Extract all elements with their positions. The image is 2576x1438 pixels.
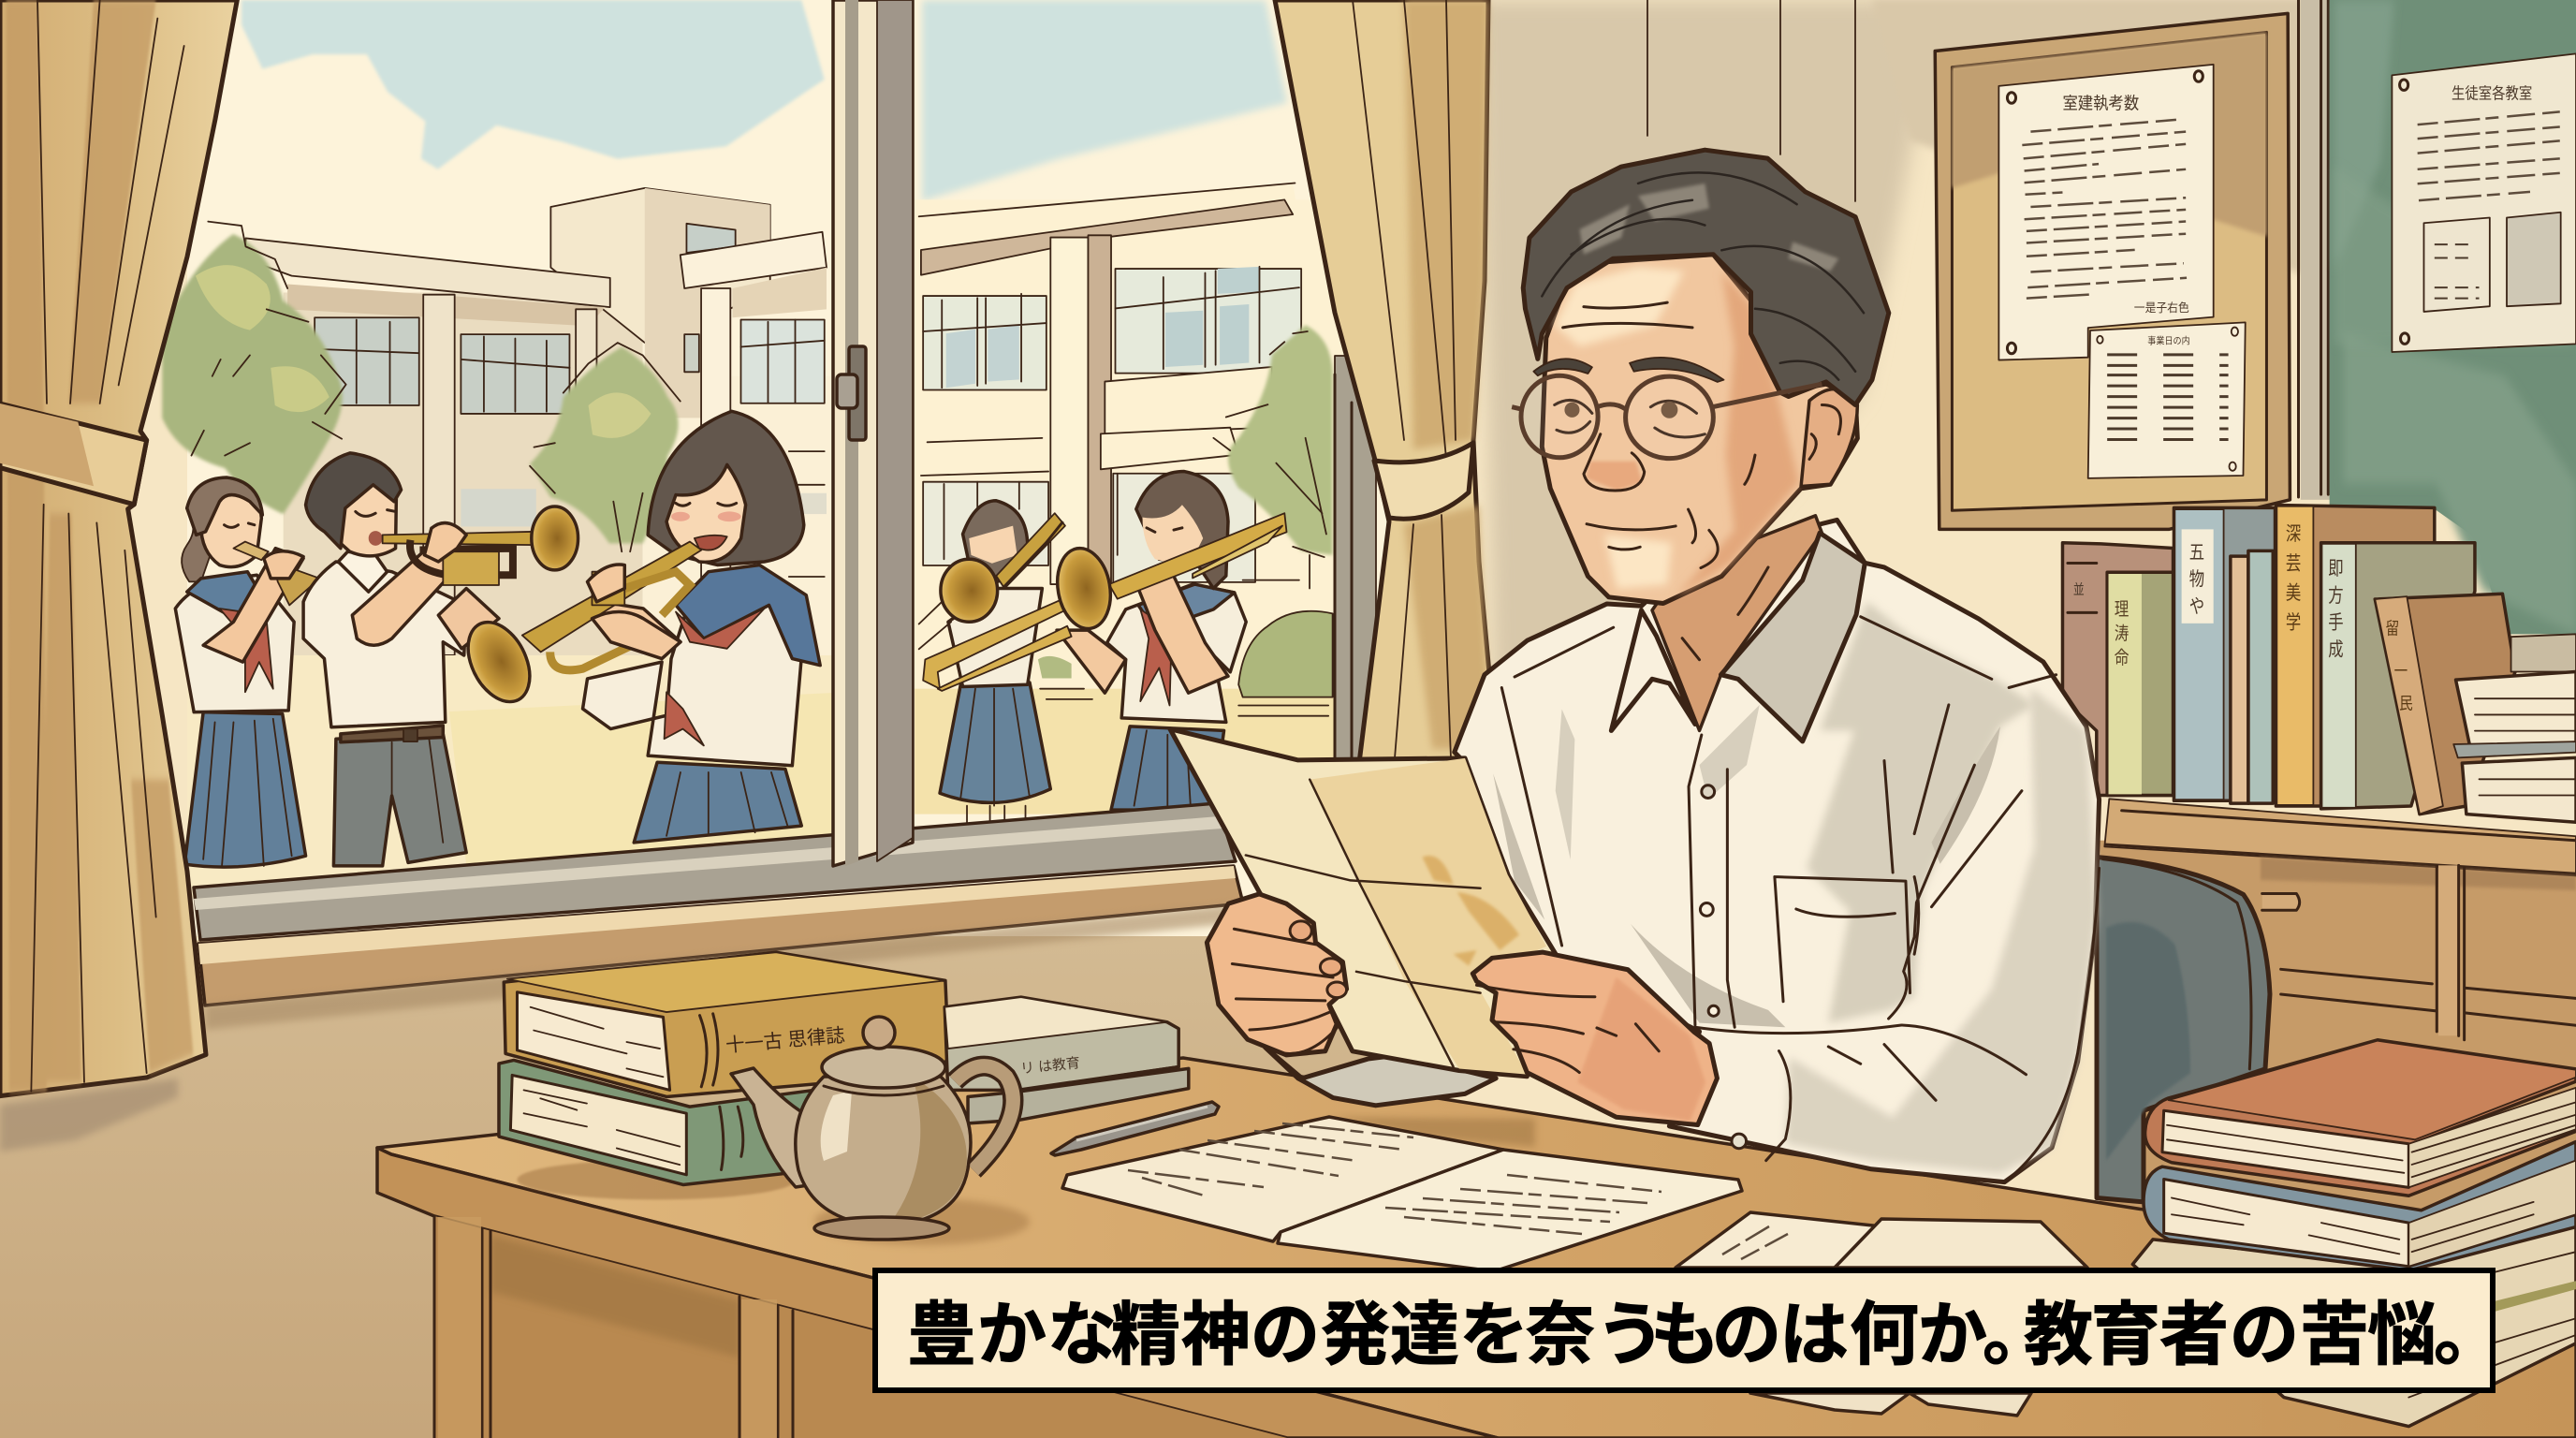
man: glasses xyxy=(1512,375,1822,459)
desk: front body and panel xyxy=(377,1148,1498,1438)
book: yellow-green volume: 涛 xyxy=(2115,623,2129,643)
notice: sheet on chalkboard xyxy=(2392,53,2576,352)
book: ochre volume: 十一古 思律誌 xyxy=(724,1025,845,1057)
icon: cabinet drawer pull xyxy=(2262,894,2300,910)
hand: left xyxy=(1207,894,1347,1055)
notice: main sheet: 室建執考数 xyxy=(2062,94,2140,113)
teapot: spout xyxy=(731,1068,814,1187)
window view: trees behind left pane xyxy=(162,222,681,551)
books on desk: yellow and green stack xyxy=(499,952,948,1199)
notice: small timetable sheet: 事業日の内 xyxy=(2147,334,2190,346)
book: yellow-green volume xyxy=(2107,572,2174,796)
pen xyxy=(1051,1102,1219,1155)
book: yellow-green volume: 理 xyxy=(2115,598,2129,620)
book: orange volume: 芸 xyxy=(2286,552,2301,574)
lower wall under window xyxy=(0,861,1404,1438)
book: pale green volume: 方 xyxy=(2328,584,2344,606)
left curtain xyxy=(0,0,237,1096)
books on desk: grey volumes behind teapot xyxy=(944,997,1189,1123)
book: orange volume: 学 xyxy=(2286,611,2301,633)
books on shelf xyxy=(2062,506,2576,822)
caption box xyxy=(875,1270,2503,1390)
papers under caption xyxy=(1676,1212,2087,1416)
book: ochre volume xyxy=(504,952,948,1096)
man: hands xyxy=(1207,894,1717,1125)
window view: ground at left pane xyxy=(187,655,833,899)
book: stack at shelf end xyxy=(2453,634,2576,822)
man: shirt shading xyxy=(1493,602,2097,1173)
book: pale green volume: 即 xyxy=(2328,557,2344,580)
man: ear xyxy=(1801,389,1857,487)
man: forehead wrinkles xyxy=(1563,302,1692,328)
letter xyxy=(1170,729,1558,1077)
man: left sleeve xyxy=(1266,1048,1496,1106)
man: head xyxy=(1512,150,1889,604)
book: brown volume: 並 xyxy=(2073,581,2085,597)
desk xyxy=(377,1058,2576,1438)
hand: right xyxy=(1472,952,1717,1125)
man: nose and mouth xyxy=(1584,434,1755,568)
open notebook xyxy=(1062,1117,1742,1271)
book: slim volumes xyxy=(2231,550,2273,803)
book: pale green volume: 手 xyxy=(2328,611,2344,633)
bulletin board xyxy=(1935,0,2331,529)
book: blue volume: 五 xyxy=(2189,541,2204,563)
centre curtain xyxy=(1275,0,1490,763)
green chalkboard and notice xyxy=(2330,0,2576,634)
window view: sky and clouds xyxy=(187,0,1404,936)
man: eyebrows xyxy=(1533,358,1723,382)
student: girl with ponytail xyxy=(175,477,319,867)
office chair xyxy=(2097,857,2270,1202)
icon: trumpet xyxy=(457,542,701,707)
man: chest pocket xyxy=(1775,877,1910,1002)
students: two trombone players at the right pane xyxy=(919,472,1287,823)
book: blue volume xyxy=(2174,507,2276,800)
teapot: handle xyxy=(955,1066,1013,1170)
man: face xyxy=(1542,255,1857,604)
notice: sheet on chalkboard: 生徒室各教室 xyxy=(2452,84,2532,103)
student: rear trombone girl xyxy=(919,501,1065,823)
man: shirt xyxy=(1455,516,2100,1182)
notice: small timetable sheet xyxy=(2088,322,2246,478)
window view: school building behind right pane xyxy=(915,183,1357,814)
book: leaning volume: 民 xyxy=(2399,694,2413,713)
book: orange volume xyxy=(2276,506,2435,806)
book: blue volume xyxy=(2144,1142,2576,1270)
student: boy with trumpet xyxy=(303,453,578,866)
teapot: body xyxy=(796,1077,971,1226)
man: hair xyxy=(1523,150,1889,404)
book: pale green volume xyxy=(2321,543,2475,809)
man: collar xyxy=(1720,533,1865,741)
book: yellow-green volume: 命 xyxy=(2115,647,2130,668)
caption text: 豊かな精神の発達を奈うものは何か。教育者の苦悩。 xyxy=(907,1296,2503,1373)
teapot xyxy=(731,1017,1030,1245)
students: three trumpet players at the left pane xyxy=(175,411,820,867)
shelf and cabinet xyxy=(2100,799,2576,1256)
book: leaning volume: 一 xyxy=(2394,662,2408,682)
right book stack xyxy=(2132,1040,2576,1427)
books on desk: grey volumes behind teapot: リ は教育 xyxy=(1019,1055,1081,1078)
left curtain floor shadow xyxy=(0,1078,178,1152)
book: olive volume xyxy=(2132,1219,2576,1427)
man: eyes xyxy=(1555,400,1705,437)
book: brown volume xyxy=(2062,543,2174,796)
man: neck xyxy=(1652,516,1822,730)
book: green volume xyxy=(499,1060,939,1184)
man: sleeve and cuff lines xyxy=(1695,1025,2027,1161)
icon: window latch xyxy=(837,346,866,440)
teapot: lid and knob xyxy=(822,1047,945,1088)
notice: main sheet xyxy=(1998,65,2214,360)
book: orange volume: 深 xyxy=(2286,522,2301,544)
book: blue volume: 物 xyxy=(2189,568,2204,590)
book: blue volume: や xyxy=(2189,595,2204,617)
book: red volume xyxy=(2145,1040,2576,1196)
book: pale green volume: 成 xyxy=(2328,638,2344,660)
window view: school building behind left pane xyxy=(245,188,830,655)
book: leaning volume xyxy=(2375,594,2515,814)
icon: trumpet xyxy=(383,506,578,585)
window frame: sill and centre post xyxy=(194,0,1376,1030)
desk: top surface xyxy=(377,1058,2576,1438)
book: orange volume: 美 xyxy=(2286,581,2302,603)
student: girl with bob hair xyxy=(457,411,820,843)
book: leaning volume: 留 xyxy=(2386,619,2399,638)
student: front trombone girl xyxy=(923,472,1287,810)
man: placket and buttons xyxy=(1689,735,1734,1027)
letter: stained fold panels xyxy=(1310,758,1546,1075)
notice: main sheet: 一是子右色 xyxy=(2134,301,2189,315)
